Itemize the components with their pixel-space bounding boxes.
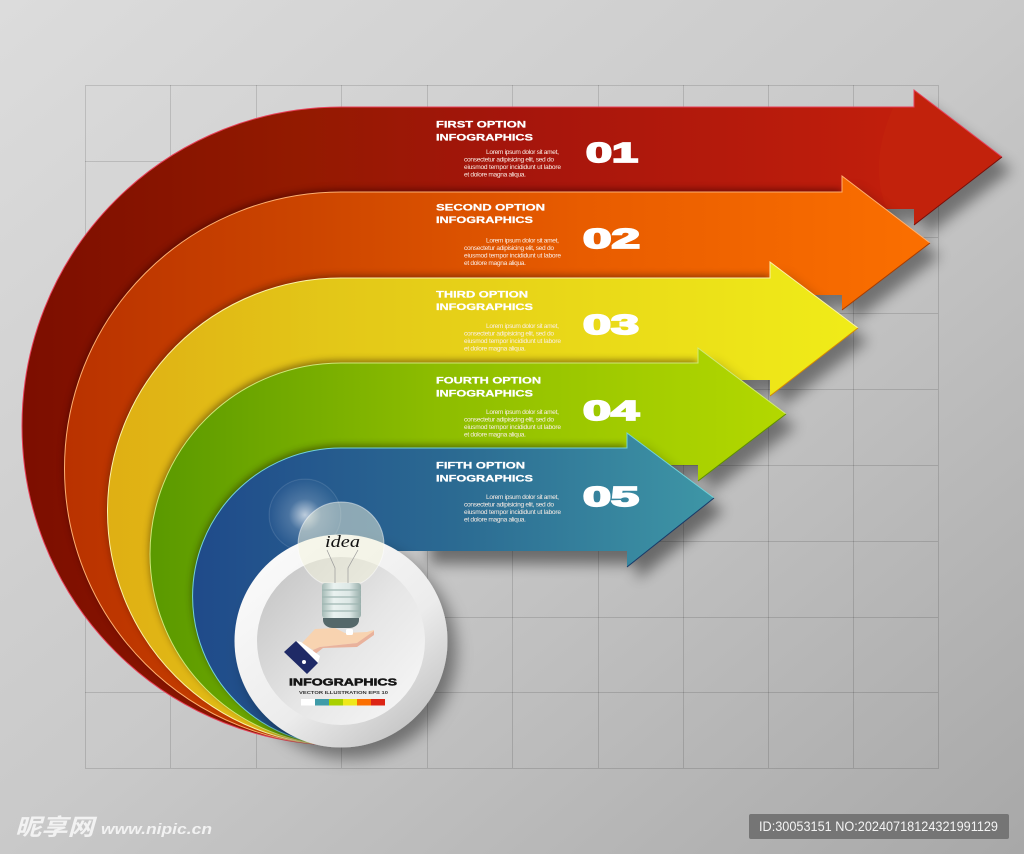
- option 2 text: [436, 202, 561, 267]
- central badge: [234, 479, 448, 748]
- option 4 text: INFOGRAPHICS: [436, 388, 533, 398]
- image id badge: ID:30053151 NO:20240718124321991129: [759, 819, 998, 834]
- option 5 text: eiusmod tempor incididunt ut labore: [464, 509, 561, 516]
- option 4 text: FOURTH OPTION: [436, 376, 541, 386]
- colour strip: [301, 699, 385, 706]
- number 02: 02: [583, 223, 640, 254]
- option 1 text: consectetur adipisicing elit, sed do: [464, 156, 554, 164]
- option 3 text: [436, 290, 561, 352]
- shadow of arrow 3: [610, 275, 868, 409]
- watermark logo: 昵享网: [15, 814, 97, 840]
- option 1 text: et dolore magna aliqua.: [464, 172, 526, 178]
- shadow of arrow 2: [660, 189, 940, 323]
- watermark logo: www.nipic.cn: [101, 821, 212, 838]
- arrow 5: blue: [193, 433, 714, 745]
- option 2 text: Lorem ipsum dolor sit amet,: [486, 238, 559, 244]
- option 2 text: SECOND OPTION: [436, 202, 545, 212]
- option 4 text: eiusmod tempor incididunt ut labore: [464, 424, 561, 431]
- option 1 text: FIRST OPTION: [436, 120, 527, 130]
- option 5 text: [436, 460, 561, 524]
- icon: open hand: [284, 628, 374, 674]
- shade cast by arrow 3 on arrow 2: [106, 275, 769, 742]
- background grid: [85, 85, 938, 768]
- option 4 text: et dolore magna aliqua.: [464, 432, 526, 438]
- badge title: INFOGRAPHICS: [289, 678, 397, 688]
- option 5 text: Lorem ipsum dolor sit amet,: [486, 494, 559, 501]
- number 03: 03: [583, 309, 639, 340]
- option 5 text: INFOGRAPHICS: [436, 474, 533, 484]
- option 2 text: et dolore magna aliqua.: [464, 260, 526, 267]
- option 4 text: Lorem ipsum dolor sit amet,: [486, 409, 559, 416]
- outer disc: [234, 534, 448, 748]
- shade cast by arrow 2 on arrow 1: [63, 189, 841, 742]
- option 5 text: et dolore magna aliqua.: [464, 516, 526, 524]
- option 1 text: Lorem ipsum dolor sit amet,: [486, 149, 559, 156]
- shadow of arrow 1: [710, 103, 1012, 238]
- idea label: idea: [325, 532, 360, 551]
- arrow 4: green: [150, 348, 786, 745]
- number 05: 05: [583, 481, 639, 512]
- option 5 text: FIFTH OPTION: [436, 460, 526, 470]
- option 2 text: INFOGRAPHICS: [436, 215, 533, 225]
- option 4 text: consectetur adipisicing elit, sed do: [464, 416, 554, 424]
- badge subtitle: VECTOR ILLUSTRATION EPS 10: [299, 690, 389, 695]
- option 1 text: eiusmod tempor incididunt ut labore: [464, 164, 561, 171]
- option 1 text: [436, 120, 561, 178]
- option 2 text: eiusmod tempor incididunt ut labore: [464, 252, 561, 260]
- option 3 text: Lorem ipsum dolor sit amet,: [486, 323, 559, 330]
- shadow of arrow 5: [430, 446, 724, 580]
- number 01: 01: [586, 137, 638, 168]
- arrow 1: red: [22, 90, 1002, 745]
- arrow 2: orange: [64, 176, 930, 745]
- option 3 text: et dolore magna aliqua.: [464, 346, 526, 352]
- option 3 text: THIRD OPTION: [436, 290, 529, 300]
- shade cast by arrow 5 on arrow 4: [192, 445, 626, 742]
- number 04: 04: [583, 395, 640, 426]
- option 2 text: consectetur adipisicing elit, sed do: [464, 245, 554, 252]
- option 5 text: consectetur adipisicing elit, sed do: [464, 502, 554, 508]
- option 3 text: eiusmod tempor incididunt ut labore: [464, 338, 561, 345]
- image id badge: [749, 814, 1009, 839]
- shadow of arrow 4: [570, 361, 796, 494]
- icon: light bulb: [269, 479, 384, 628]
- option 3 text: INFOGRAPHICS: [436, 302, 533, 312]
- option 1 text: INFOGRAPHICS: [436, 132, 533, 142]
- watermark logo: [15, 814, 212, 840]
- arrow 3: yellow: [108, 262, 858, 745]
- inner disc: [257, 557, 425, 725]
- option 4 text: [436, 376, 561, 438]
- shade cast by arrow 4 on arrow 3: [149, 360, 697, 742]
- option 3 text: consectetur adipisicing elit, sed do: [464, 330, 554, 338]
